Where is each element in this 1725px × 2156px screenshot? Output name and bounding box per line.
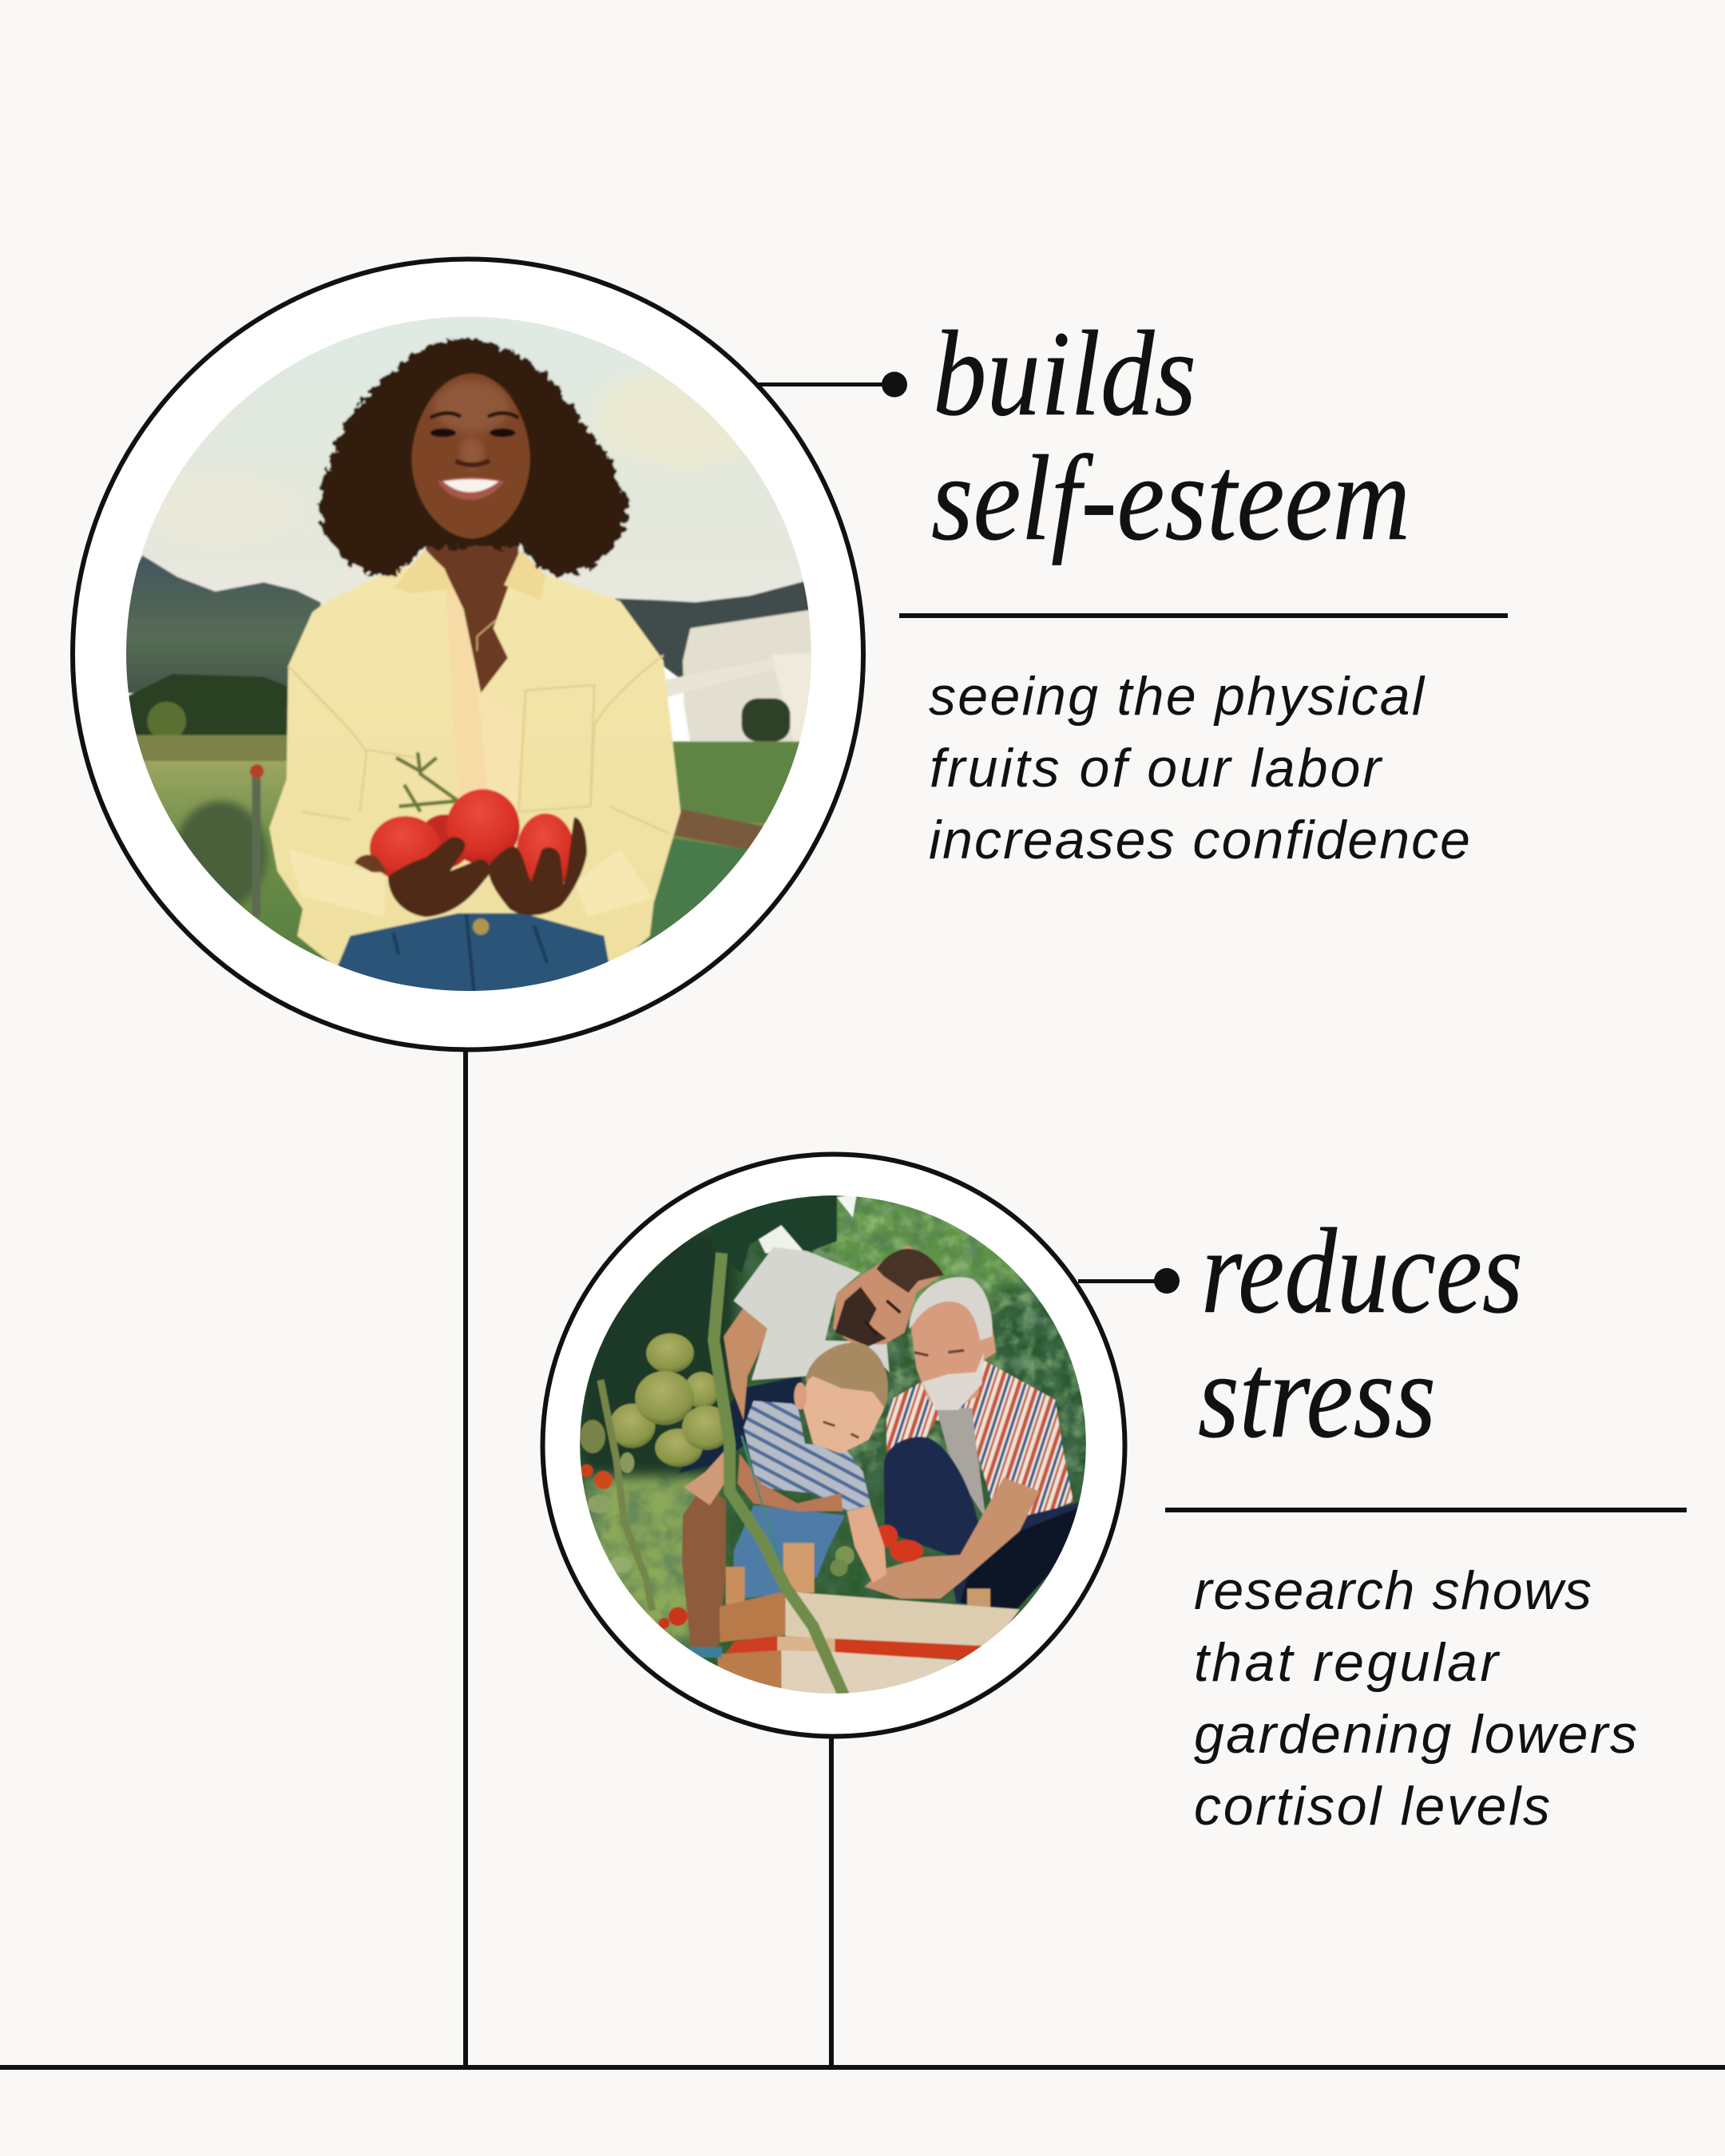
old man's undershirt	[936, 1408, 985, 1519]
text: seeing the physical fruits of our labor increases confidence	[929, 666, 1470, 870]
red tomatoes near crate	[875, 1524, 898, 1547]
crate posts	[726, 1567, 745, 1604]
field base	[124, 752, 820, 1001]
blue shoe	[689, 1647, 722, 1658]
greenhouse	[683, 609, 815, 752]
foliage background	[575, 1190, 1091, 1702]
shirt	[269, 553, 680, 965]
baseline rule	[0, 2065, 1725, 2070]
left foliage	[175, 801, 267, 909]
large circle frame	[73, 259, 863, 1049]
main vine	[714, 1253, 845, 1698]
hair	[319, 338, 628, 577]
text: research shows that regular gardening lowers cortisol levels	[1194, 1560, 1637, 1837]
boy's shorts	[734, 1505, 845, 1599]
smile	[438, 477, 504, 500]
dark left foliage	[579, 1229, 734, 1476]
mountains	[124, 555, 329, 693]
text: seeing the physical fruits of our labor increases confidence: fruits of our labor	[930, 738, 1382, 799]
neck and chest	[425, 541, 520, 693]
old man's shirt	[886, 1361, 1073, 1516]
hands	[355, 855, 388, 872]
divider: builds self-esteem	[899, 613, 1508, 618]
sprinkler post	[252, 774, 260, 917]
old man's beard	[922, 1353, 984, 1410]
stem from large circle	[463, 1048, 468, 2067]
foliage mottling	[813, 1194, 1091, 1472]
old man's arm	[865, 1477, 1040, 1599]
crate top board	[785, 1591, 1020, 1647]
photo: woman holding tomatoes	[124, 310, 820, 1006]
sky gaps	[757, 1224, 803, 1254]
small circle frame	[543, 1155, 1124, 1736]
heading: reduces stress: reduces	[1201, 1204, 1523, 1339]
connector: builds self-esteem	[758, 372, 907, 398]
heading: reduces stress	[1198, 1204, 1523, 1464]
old man's head	[910, 1278, 996, 1410]
boy's shirt	[744, 1401, 870, 1512]
vine	[396, 752, 458, 812]
left stems	[601, 1380, 652, 1611]
tree line	[129, 674, 289, 736]
heading: builds self-esteem	[931, 307, 1410, 566]
man's shirt	[734, 1247, 890, 1380]
divider: reduces stress	[1165, 1508, 1687, 1512]
tomatoes in crate	[726, 1634, 777, 1655]
placket	[446, 589, 479, 733]
right field	[668, 742, 815, 822]
text: seeing the physical fruits of our labor increases confidence: seeing the physical	[929, 666, 1426, 727]
shirt seams	[288, 656, 668, 834]
boy's arm	[847, 1505, 886, 1583]
boy's head	[803, 1350, 886, 1453]
crate bottom board	[781, 1651, 958, 1698]
collar	[394, 550, 453, 593]
man's trousers	[678, 1376, 805, 1473]
hanging green tomatoes	[646, 1334, 694, 1373]
jeans	[337, 912, 610, 991]
text: research shows that regular gardening lowers cortisol levels: that regular	[1194, 1632, 1500, 1693]
heading: builds self-esteem: self-esteem	[931, 431, 1410, 566]
man's arm	[724, 1305, 769, 1420]
photo: family picking tomatoes	[575, 1190, 1091, 1702]
text: research shows that regular gardening lowers cortisol levels: cortisol levels	[1194, 1776, 1550, 1837]
heading: reduces stress: stress	[1198, 1329, 1436, 1464]
heading: builds self-esteem: builds	[933, 307, 1196, 442]
face	[412, 374, 530, 539]
man's hands on boy	[738, 1453, 843, 1512]
man's head	[833, 1245, 944, 1345]
sky	[124, 310, 820, 612]
man's leg	[682, 1488, 726, 1648]
text: seeing the physical fruits of our labor increases confidence: increases confidence	[929, 810, 1470, 870]
brows and eyes	[430, 413, 518, 418]
text: research shows that regular gardening lowers cortisol levels: research shows	[1194, 1560, 1592, 1621]
stem from small circle	[829, 1734, 834, 2067]
text: research shows that regular gardening lowers cortisol levels: gardening lowers	[1194, 1704, 1637, 1765]
old man's jeans	[884, 1437, 1079, 1611]
top leaves	[710, 1194, 837, 1273]
connector: reduces stress	[1078, 1268, 1180, 1294]
tomatoes	[425, 813, 466, 868]
